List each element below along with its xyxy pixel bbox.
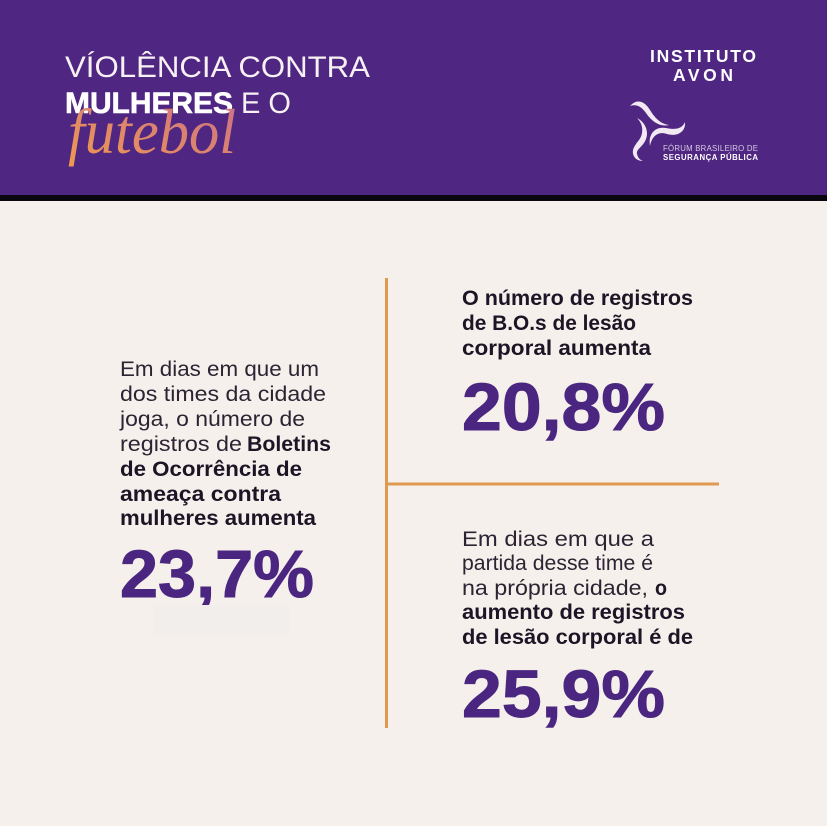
text block: top right statistic: O número de registros bbox=[462, 287, 693, 310]
text block: bottom right statistic: Em dias em que a bbox=[462, 528, 654, 551]
text block: top right statistic: de B.O.s de lesão bbox=[462, 312, 636, 335]
horizontal divider bbox=[386, 482, 719, 486]
text block: left statistic: de Ocorrência de bbox=[120, 458, 302, 481]
text block: bottom right statistic: aumento de registros bbox=[462, 601, 685, 624]
text block: bottom right statistic: na própria cidade, bbox=[462, 577, 648, 600]
text block: bottom right statistic: partida desse time é bbox=[462, 552, 653, 575]
title: futebol bbox=[68, 96, 236, 167]
logo: Instituto Avon bbox=[650, 46, 756, 85]
grey patch bbox=[153, 605, 289, 635]
text block: left statistic: Em dias em que um bbox=[120, 358, 319, 381]
text block: bottom right statistic: de lesão corporal é de bbox=[462, 626, 693, 649]
text block: bottom right statistic bbox=[462, 528, 693, 649]
logo: Fórum Brasileiro de Segurança Pública: FÓRUM BRASILEIRO DE bbox=[663, 144, 758, 153]
text block: top right statistic bbox=[462, 287, 693, 360]
number: 25,9%: 25,9% bbox=[462, 657, 665, 732]
logo: Instituto Avon: AVON bbox=[673, 65, 733, 85]
text block: left statistic: dos times da cidade bbox=[120, 383, 326, 406]
text block: top right statistic: corporal aumenta bbox=[462, 337, 651, 360]
text block: left statistic: joga, o número de bbox=[119, 408, 305, 431]
text block: left statistic bbox=[119, 358, 331, 530]
logo: Fórum Brasileiro de Segurança Pública bbox=[630, 101, 758, 162]
title: VÍOLÊNCIA CONTRA bbox=[65, 51, 370, 84]
number: 20,8%: 20,8% bbox=[462, 370, 665, 445]
logo: Fórum Brasileiro de Segurança Pública: SEGURANÇA PÚBLICA bbox=[663, 153, 758, 162]
title: MULHERES bbox=[65, 87, 233, 120]
title: E O bbox=[241, 87, 291, 120]
number: 23,7%: 23,7% bbox=[120, 537, 314, 612]
text block: left statistic: ameaça contra bbox=[120, 483, 281, 506]
logo: Instituto Avon: INSTITUTO bbox=[650, 46, 756, 66]
text block: left statistic: Boletins bbox=[247, 433, 331, 456]
header band bbox=[0, 0, 827, 201]
title bbox=[65, 51, 370, 167]
text block: left statistic: registros de bbox=[120, 433, 242, 456]
text block: bottom right statistic: o bbox=[655, 577, 667, 600]
text block: left statistic: mulheres aumenta bbox=[120, 507, 316, 530]
vertical divider bbox=[385, 278, 388, 728]
